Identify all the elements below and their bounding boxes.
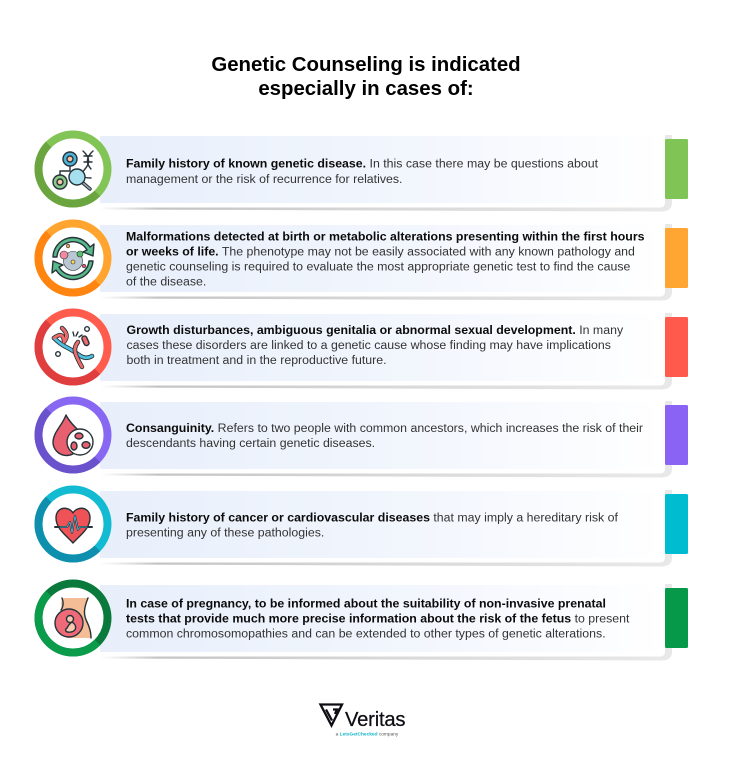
icon: blood drop and cells [53, 415, 93, 455]
title: especially in cases of: [258, 78, 474, 100]
title [211, 54, 521, 100]
icon ring [38, 400, 107, 470]
title: Genetic Counseling is indicated [211, 54, 521, 76]
icon ring [38, 584, 107, 653]
icon: heart with ECG line [55, 508, 92, 543]
icon: cell with cycle arrows [52, 238, 94, 280]
body text: In this case there may be questions about [370, 156, 598, 170]
logo: Veritas: Veritas [345, 709, 405, 731]
color tab [665, 139, 688, 199]
logo: Veritas: a LetsGetChecked company [336, 732, 399, 738]
icon ring [38, 134, 107, 204]
body text: Malformations detected at birth or metabolic alterations presenting within the first hours [126, 230, 645, 244]
panel: consanguinity [38, 400, 688, 478]
icon: Veritas mark [320, 704, 342, 726]
panel: pregnancy: to present [575, 612, 629, 626]
panel: malformations and metabolic alterations: of the disease. [126, 274, 206, 288]
panel: malformations and metabolic alterations [38, 224, 688, 300]
logo: Veritas [320, 704, 405, 738]
panel: family history of genetic disease: management or the risk of recurrence for relatives. [126, 172, 402, 186]
panel: growth disturbances [38, 312, 688, 390]
icon ring [38, 490, 107, 559]
icon: family tree and DNA under magnifier [53, 151, 93, 189]
body text: In case of pregnancy, to be informed about the suitability of non-invasive prenatal [126, 596, 606, 610]
panel: pregnancy: common chromosomopathies and can be extended to other types of genetic alterations. [126, 626, 606, 640]
body text: that may imply a hereditary risk of [433, 510, 618, 524]
panel: cancer or cardiovascular history: presenting any of these pathologies. [126, 526, 324, 540]
body text: Family history of cancer or cardiovascular diseases [126, 510, 430, 524]
body text: Family history of known genetic disease. [126, 156, 366, 170]
body text: In many [579, 323, 623, 337]
panel: cancer or cardiovascular history [38, 490, 688, 566]
body text: Growth disturbances, ambiguous genitalia or abnormal sexual development. [126, 323, 576, 337]
body text: Consanguinity. [126, 421, 214, 435]
body text: Refers to two people with common ancestors, which increases the risk of their [218, 421, 643, 435]
color tab [665, 494, 688, 554]
panel: growth disturbances: cases these disorders are linked to a genetic cause whose finding may have implications [126, 338, 611, 352]
color tab [665, 228, 688, 288]
panel: family history of genetic disease [38, 134, 688, 212]
color tab [665, 405, 688, 465]
color tab [665, 588, 688, 648]
icon ring [38, 224, 107, 293]
panel: consanguinity: descendants having certain genetic diseases. [126, 436, 375, 450]
panel: malformations and metabolic alterations: genetic counseling is required to evaluate the most appropriate genetic test to find the cause [126, 260, 630, 274]
color tab [665, 317, 688, 377]
panel: growth disturbances: both in treatment and in the reproductive future. [126, 353, 387, 367]
panel: malformations and metabolic alterations: or weeks of life. [126, 244, 219, 258]
panel: pregnancy [38, 584, 688, 660]
icon: damaged DNA helix [54, 327, 92, 367]
panel: pregnancy: tests that provide much more precise information about the risk of the fetus [126, 612, 571, 626]
icon ring [38, 312, 107, 382]
panel: malformations and metabolic alterations: The phenotype may not be easily associated with any known pathology and [222, 244, 635, 258]
icon: pregnant belly with fetus [55, 598, 91, 638]
